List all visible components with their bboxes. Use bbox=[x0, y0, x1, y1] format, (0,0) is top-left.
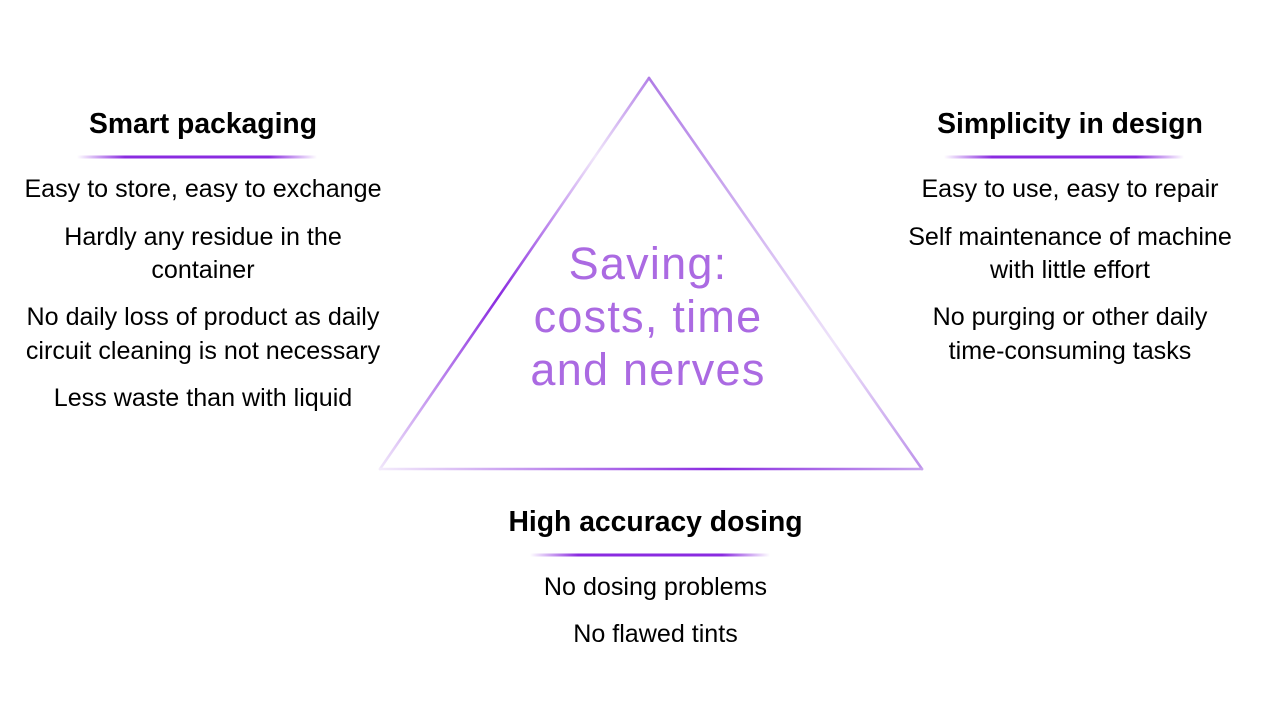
text block: smart packaging points: container bbox=[151, 256, 255, 284]
center text: saving: and nerves bbox=[530, 344, 766, 395]
center text: saving: costs, time bbox=[534, 291, 762, 342]
heading: simplicity in design: Simplicity in design bbox=[937, 107, 1203, 139]
text block: simplicity points: Easy to use, easy to repair bbox=[921, 175, 1219, 203]
underline: smart packaging bbox=[77, 156, 317, 158]
text block: simplicity points: time-consuming tasks bbox=[949, 337, 1191, 365]
text block: smart packaging points: Less waste than with liquid bbox=[54, 384, 352, 412]
text block: dosing points: No flawed tints bbox=[573, 620, 738, 648]
text block: smart packaging points: Hardly any residue in the bbox=[64, 223, 342, 251]
text block: simplicity points: Self maintenance of machine bbox=[908, 223, 1232, 251]
triangle bbox=[380, 78, 922, 469]
center text: saving bbox=[530, 238, 766, 395]
heading: smart packaging: Smart packaging bbox=[89, 107, 317, 139]
text block: smart packaging points: Easy to store, easy to exchange bbox=[24, 175, 382, 203]
text block: smart packaging points bbox=[24, 175, 382, 412]
underline: high accuracy dosing bbox=[530, 554, 770, 556]
center text: saving: Saving: bbox=[569, 238, 727, 289]
text block: simplicity points: No purging or other daily bbox=[933, 303, 1208, 331]
text block: dosing points bbox=[544, 573, 767, 648]
text block: dosing points: No dosing problems bbox=[544, 573, 767, 601]
underline: simplicity in design bbox=[944, 156, 1184, 158]
panel: simplicity in design bbox=[908, 107, 1232, 365]
panel: smart packaging bbox=[24, 107, 382, 412]
text block: smart packaging points: circuit cleaning is not necessary bbox=[26, 337, 381, 365]
text block: simplicity points: with little effort bbox=[989, 256, 1150, 284]
text block: simplicity points bbox=[908, 175, 1232, 365]
panel: high accuracy dosing bbox=[508, 505, 803, 648]
heading: high accuracy dosing: High accuracy dosing bbox=[508, 505, 803, 537]
text block: smart packaging points: No daily loss of product as daily bbox=[27, 303, 380, 331]
